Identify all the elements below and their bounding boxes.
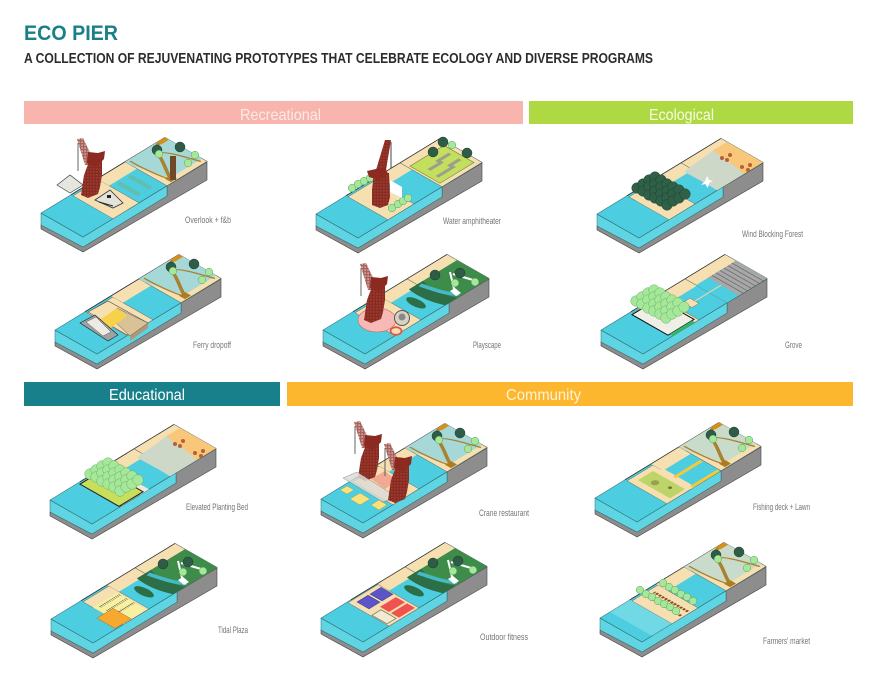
blue courts <box>357 587 393 609</box>
icon: crane <box>360 263 388 323</box>
pink dining terrace <box>371 471 397 489</box>
diagram: Grove <box>601 254 767 369</box>
heading bar: Ecological: Ecological <box>649 107 714 124</box>
diagram: Playscape <box>323 254 489 369</box>
heading bar: Educational: Educational <box>109 387 185 404</box>
caption: Fishing deck + Lawn: Fishing deck + Lawn <box>753 502 810 513</box>
caption: Water amphitheater: Water amphitheater <box>443 216 501 227</box>
tree rows <box>636 579 697 615</box>
icon: crane <box>367 140 391 208</box>
caption: Overlook + f&b: Overlook + f&b <box>185 215 231 226</box>
pink play area <box>358 308 396 332</box>
grove floor <box>632 299 697 337</box>
round play structure <box>394 310 410 326</box>
diagram: Ferry dropoff <box>55 254 221 369</box>
caption: Playscape: Playscape <box>473 340 501 351</box>
heading bar: Community <box>287 382 853 406</box>
stepped seawall <box>708 261 767 295</box>
subtitle: A COLLECTION OF REJUVENATING PROTOTYPES THAT CELEBRATE ECOLOGY AND DIVERSE PROGRAMS <box>24 51 653 67</box>
floating yellow decks <box>340 486 387 510</box>
crane two <box>384 443 412 503</box>
heading bar: Community: Community <box>506 387 581 404</box>
diagram: Water amphitheater <box>316 137 482 253</box>
grove trees <box>631 285 689 323</box>
forest <box>632 172 690 210</box>
heading bar: Recreational <box>24 101 523 124</box>
caption: Wind Blocking Forest: Wind Blocking Forest <box>742 229 803 240</box>
diagram: Elevated Planting Bed <box>50 424 216 539</box>
caption: Elevated Planting Bed: Elevated Planting Bed <box>186 502 248 513</box>
glass roof plane <box>343 472 397 502</box>
fitness platform <box>348 584 419 626</box>
caption: Ferry dropoff: Ferry dropoff <box>193 340 231 351</box>
red ring <box>390 327 402 335</box>
diagram: Crane restaurant <box>321 421 487 538</box>
lawn <box>638 471 685 498</box>
icon: crane <box>77 138 105 198</box>
yellow plaza <box>100 308 127 328</box>
caption: Grove: Grove <box>785 340 802 351</box>
caption: Farmers' market: Farmers' market <box>763 636 810 647</box>
bed trees <box>85 458 143 496</box>
f&b building <box>95 190 123 208</box>
diagram: Wind Blocking Forest <box>597 138 763 253</box>
market stalls <box>647 592 688 616</box>
title: ECO PIER <box>24 22 118 45</box>
white sculpture <box>701 176 713 188</box>
orange plaza <box>97 608 131 628</box>
raised terminal platform <box>88 301 148 335</box>
planting bed <box>80 469 143 506</box>
diagram: Farmers' market <box>600 542 766 657</box>
tidal steps <box>93 593 146 624</box>
terminal building <box>115 308 148 341</box>
caption: Tidal Plaza: Tidal Plaza <box>218 625 248 636</box>
heading bar: Ecological <box>529 101 853 124</box>
terraced lawn <box>410 145 474 183</box>
diagram: Outdoor fitness <box>321 542 487 657</box>
outlined court <box>372 610 396 624</box>
caption: Crane restaurant: Crane restaurant <box>479 508 529 519</box>
white screen wall <box>390 180 402 198</box>
red courts <box>380 597 415 618</box>
diagram: Tidal Plaza <box>51 543 217 658</box>
trees <box>348 137 472 212</box>
fishing decks <box>673 460 720 488</box>
heading bar: Educational <box>24 382 280 406</box>
icon: ferry <box>80 315 118 341</box>
caption: Outdoor fitness: Outdoor fitness <box>480 632 528 643</box>
diagram: Overlook + f&b <box>41 137 207 252</box>
diagram: Fishing deck + Lawn <box>595 422 761 537</box>
icon: lookout tower <box>170 156 176 180</box>
crane one <box>354 421 382 481</box>
overlook deck <box>57 175 83 193</box>
cross band <box>659 468 695 489</box>
floating pier <box>683 298 699 308</box>
heading bar: Recreational: Recreational <box>240 107 321 124</box>
